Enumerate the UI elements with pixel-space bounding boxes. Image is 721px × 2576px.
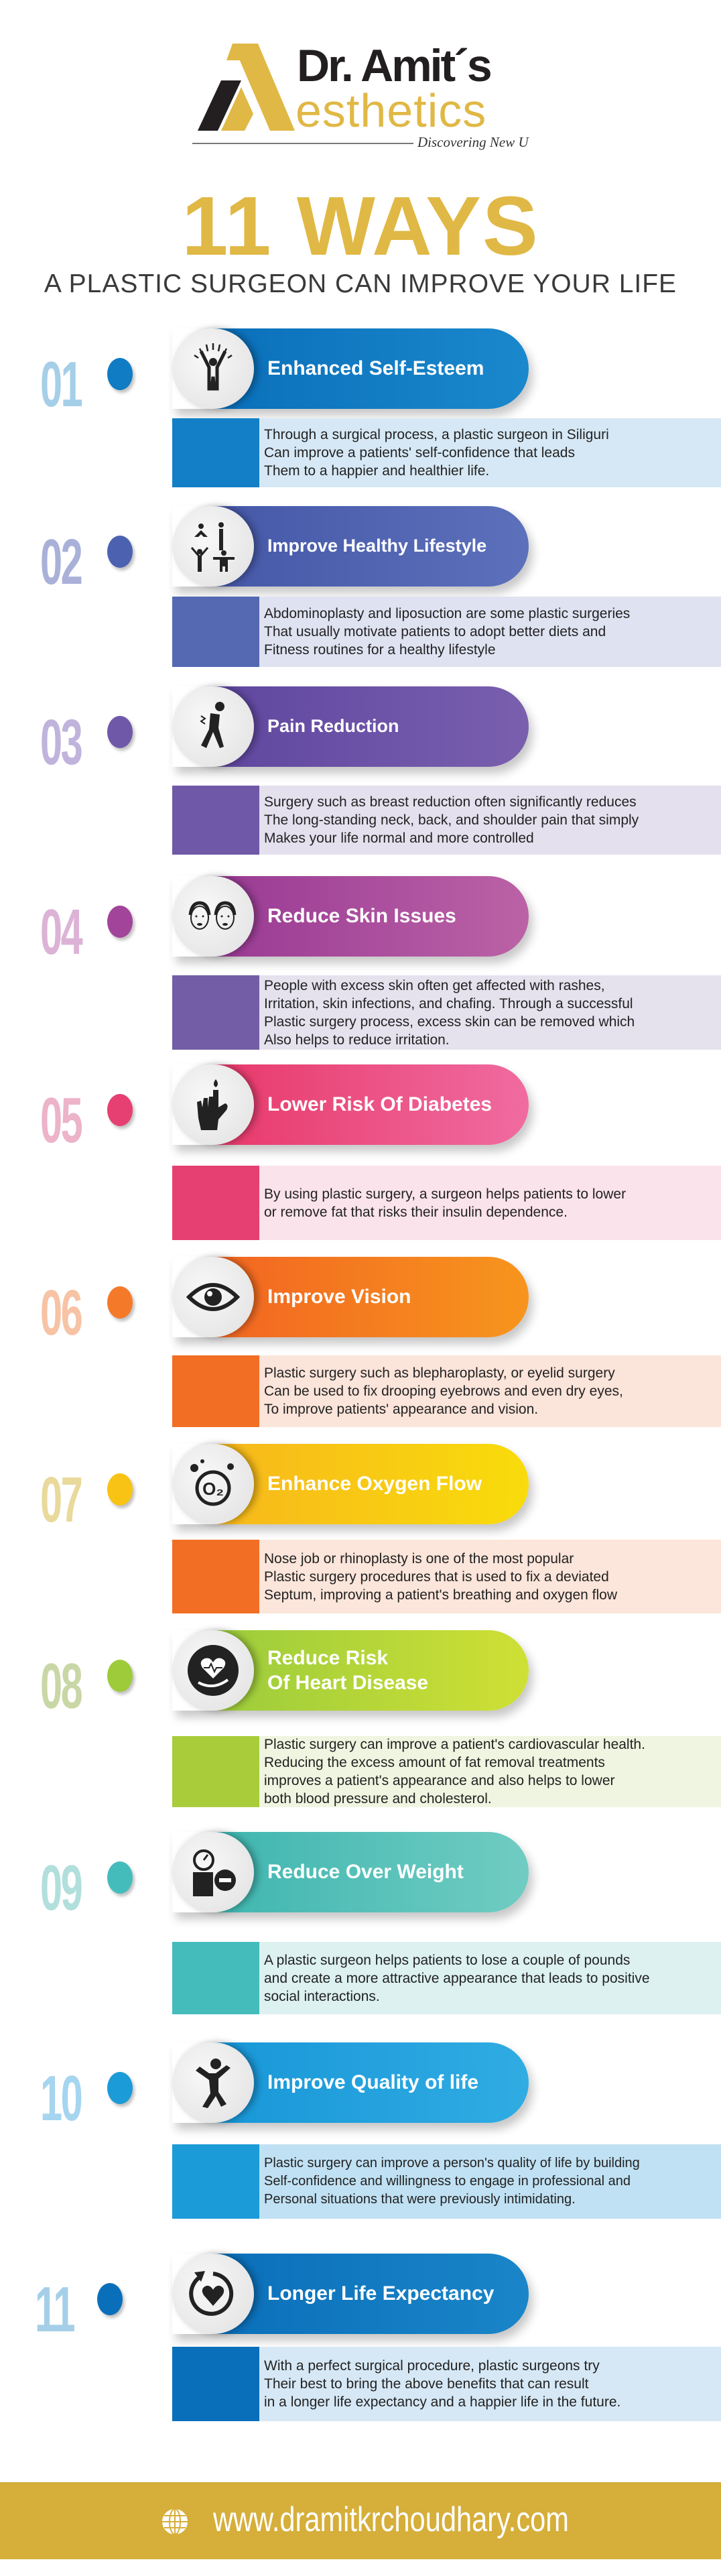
description: The long-standing neck, back, and shoulder pain that simply (264, 812, 639, 828)
number: 09 (40, 1852, 81, 1924)
description: Irritation, skin infections, and chafing. Through a successful (264, 996, 633, 1011)
description: Plastic surgery process, excess skin can be removed which (264, 1014, 635, 1030)
footer (0, 2482, 721, 2559)
description (172, 2347, 721, 2421)
icon: back pain (172, 686, 254, 767)
item 08 (40, 1626, 721, 1807)
number: 04 (40, 896, 81, 968)
item 05 (40, 1060, 721, 1240)
description: Fitness routines for a healthy lifestyle (264, 642, 496, 658)
pill: Pain Reduction (172, 686, 529, 767)
description: Can be used to fix drooping eyebrows and even dry eyes, (264, 1384, 623, 1399)
description (172, 2144, 721, 2219)
icon: O2 (172, 1444, 254, 1524)
pill: Improve Quality of life (172, 2042, 529, 2123)
icon: O2: O₂ (202, 1479, 224, 1499)
pill: Enhanced Self-Esteem (172, 328, 529, 409)
description: Septum, improving a patient's breathing and oxygen flow (264, 1587, 617, 1602)
logo (192, 40, 529, 150)
pill: Reduce Risk Of Heart Disease (172, 1630, 529, 1711)
icon: heart in hand (172, 1630, 254, 1711)
icon: person cheering (172, 328, 254, 409)
description: Plastic surgery can improve a patient's cardiovascular health. (264, 1737, 645, 1752)
pill: Reduce Over Weight (172, 1832, 529, 1912)
description: Can improve a patients' self-confidence that leads (264, 445, 575, 461)
description: That usually motivate patients to adopt better diets and (264, 624, 606, 639)
description: Also helps to reduce irritation. (264, 1032, 450, 1047)
pill: Enhance Oxygen Flow (172, 1444, 529, 1524)
pill: Reduce Risk Of Heart Disease: Of Heart Disease (267, 1672, 428, 1694)
description: To improve patients' appearance and vision. (264, 1402, 538, 1417)
description: Them to a happier and healthier life. (264, 463, 489, 479)
description: Personal situations that were previously intimidating. (264, 2192, 576, 2207)
pill: Improve Quality of life: Improve Quality of life (267, 2071, 478, 2093)
number: 05 (40, 1085, 81, 1156)
description: improves a patient's appearance and also helps to lower (264, 1773, 615, 1788)
icon: globe (162, 2509, 188, 2534)
description: Nose job or rhinoplasty is one of the most popular (264, 1551, 574, 1566)
icon: fitness people (172, 506, 254, 587)
item 02 (40, 503, 721, 667)
title: 11 WAYS (182, 180, 539, 273)
pill: Enhanced Self-Esteem: Enhanced Self-Esteem (267, 357, 484, 379)
description: or remove fat that risks their insulin dependence. (264, 1204, 568, 1220)
description: A plastic surgeon helps patients to lose a couple of pounds (264, 1952, 630, 1968)
description: Abdominoplasty and liposuction are some plastic surgeries (264, 606, 630, 621)
pill: Lower Risk Of Diabetes (172, 1064, 529, 1145)
description: in a longer life expectancy and a happier life in the future. (264, 2394, 620, 2410)
icon: jumping person (172, 2042, 254, 2123)
subtitle: A PLASTIC SURGEON CAN IMPROVE YOUR LIFE (44, 269, 677, 298)
description: Through a surgical process, a plastic surgeon in Siliguri (264, 427, 609, 442)
icon: eye (172, 1257, 254, 1337)
pill: Pain Reduction: Pain Reduction (267, 716, 399, 736)
description (172, 1942, 721, 2014)
description: People with excess skin often get affected with rashes, (264, 977, 605, 993)
pill: Improve Healthy Lifestyle: Improve Healthy Lifestyle (267, 536, 486, 556)
item 03 (40, 682, 721, 855)
description (172, 786, 721, 855)
number: 07 (40, 1464, 81, 1536)
description (172, 1540, 721, 1613)
icon: scale with minus (172, 1832, 254, 1912)
description (172, 1166, 721, 1240)
description: With a perfect surgical procedure, plastic surgeons try (264, 2358, 600, 2374)
pill: Reduce Skin Issues (172, 876, 529, 957)
description: Reducing the excess amount of fat removal treatments (264, 1755, 605, 1770)
pill: Reduce Risk Of Heart Disease: Reduce Risk (267, 1646, 388, 1669)
pill: Improve Vision: Improve Vision (267, 1286, 411, 1308)
description: Makes your life normal and more controlled (264, 831, 534, 846)
item 11 (35, 2250, 721, 2421)
item 10 (40, 2039, 721, 2219)
pill: Longer Life Expectancy (172, 2254, 529, 2334)
number: 08 (40, 1650, 81, 1722)
description: Their best to bring the above benefits that can result (264, 2376, 588, 2392)
description: Surgery such as breast reduction often significantly reduces (264, 794, 637, 810)
pill: Lower Risk Of Diabetes: Lower Risk Of Diabetes (267, 1093, 492, 1115)
description (172, 597, 721, 667)
number: 01 (40, 349, 81, 420)
logo: esthetics (296, 84, 486, 137)
description: Self-confidence and willingness to engage in professional and (264, 2174, 631, 2189)
description: Plastic surgery can improve a person's quality of life by building (264, 2156, 640, 2170)
description (172, 1736, 721, 1807)
item 09 (40, 1829, 721, 2014)
description: both blood pressure and cholesterol. (264, 1791, 492, 1806)
description (172, 975, 721, 1050)
number: 03 (40, 707, 81, 778)
description: and create a more attractive appearance that leads to positive (264, 1971, 650, 1985)
number: 10 (40, 2063, 81, 2134)
item 07 (40, 1440, 721, 1613)
icon: finger blood drop (172, 1064, 254, 1145)
number: 06 (40, 1277, 81, 1349)
website url: www.dramitkrchoudhary.com (213, 2500, 569, 2539)
logo mark A (198, 44, 295, 131)
pill: Reduce Skin Issues: Reduce Skin Issues (267, 905, 456, 927)
item 04 (40, 873, 721, 1050)
description (172, 1355, 721, 1427)
pill: Reduce Over Weight: Reduce Over Weight (267, 1861, 464, 1883)
icon: heart cycle (172, 2254, 254, 2334)
description: Plastic surgery procedures that is used to fix a deviated (264, 1569, 609, 1585)
description: By using plastic surgery, a surgeon helps patients to lower (264, 1186, 626, 1201)
number: 02 (40, 526, 81, 598)
logo text: Dr. Amit´s (297, 40, 490, 91)
pill: Improve Vision (172, 1257, 529, 1337)
description: social interactions. (264, 1988, 380, 2004)
pill: Enhance Oxygen Flow: Enhance Oxygen Flow (267, 1473, 482, 1495)
logo: Discovering New U (417, 134, 529, 150)
item 06 (40, 1253, 721, 1427)
number: 11 (35, 2274, 74, 2345)
icon: two faces (172, 876, 254, 957)
item 01 (40, 324, 721, 487)
description: Plastic surgery such as blepharoplasty, or eyelid surgery (264, 1365, 615, 1381)
pill: Longer Life Expectancy: Longer Life Expectancy (267, 2282, 494, 2305)
description (172, 418, 721, 487)
pill: Improve Healthy Lifestyle (172, 506, 529, 587)
